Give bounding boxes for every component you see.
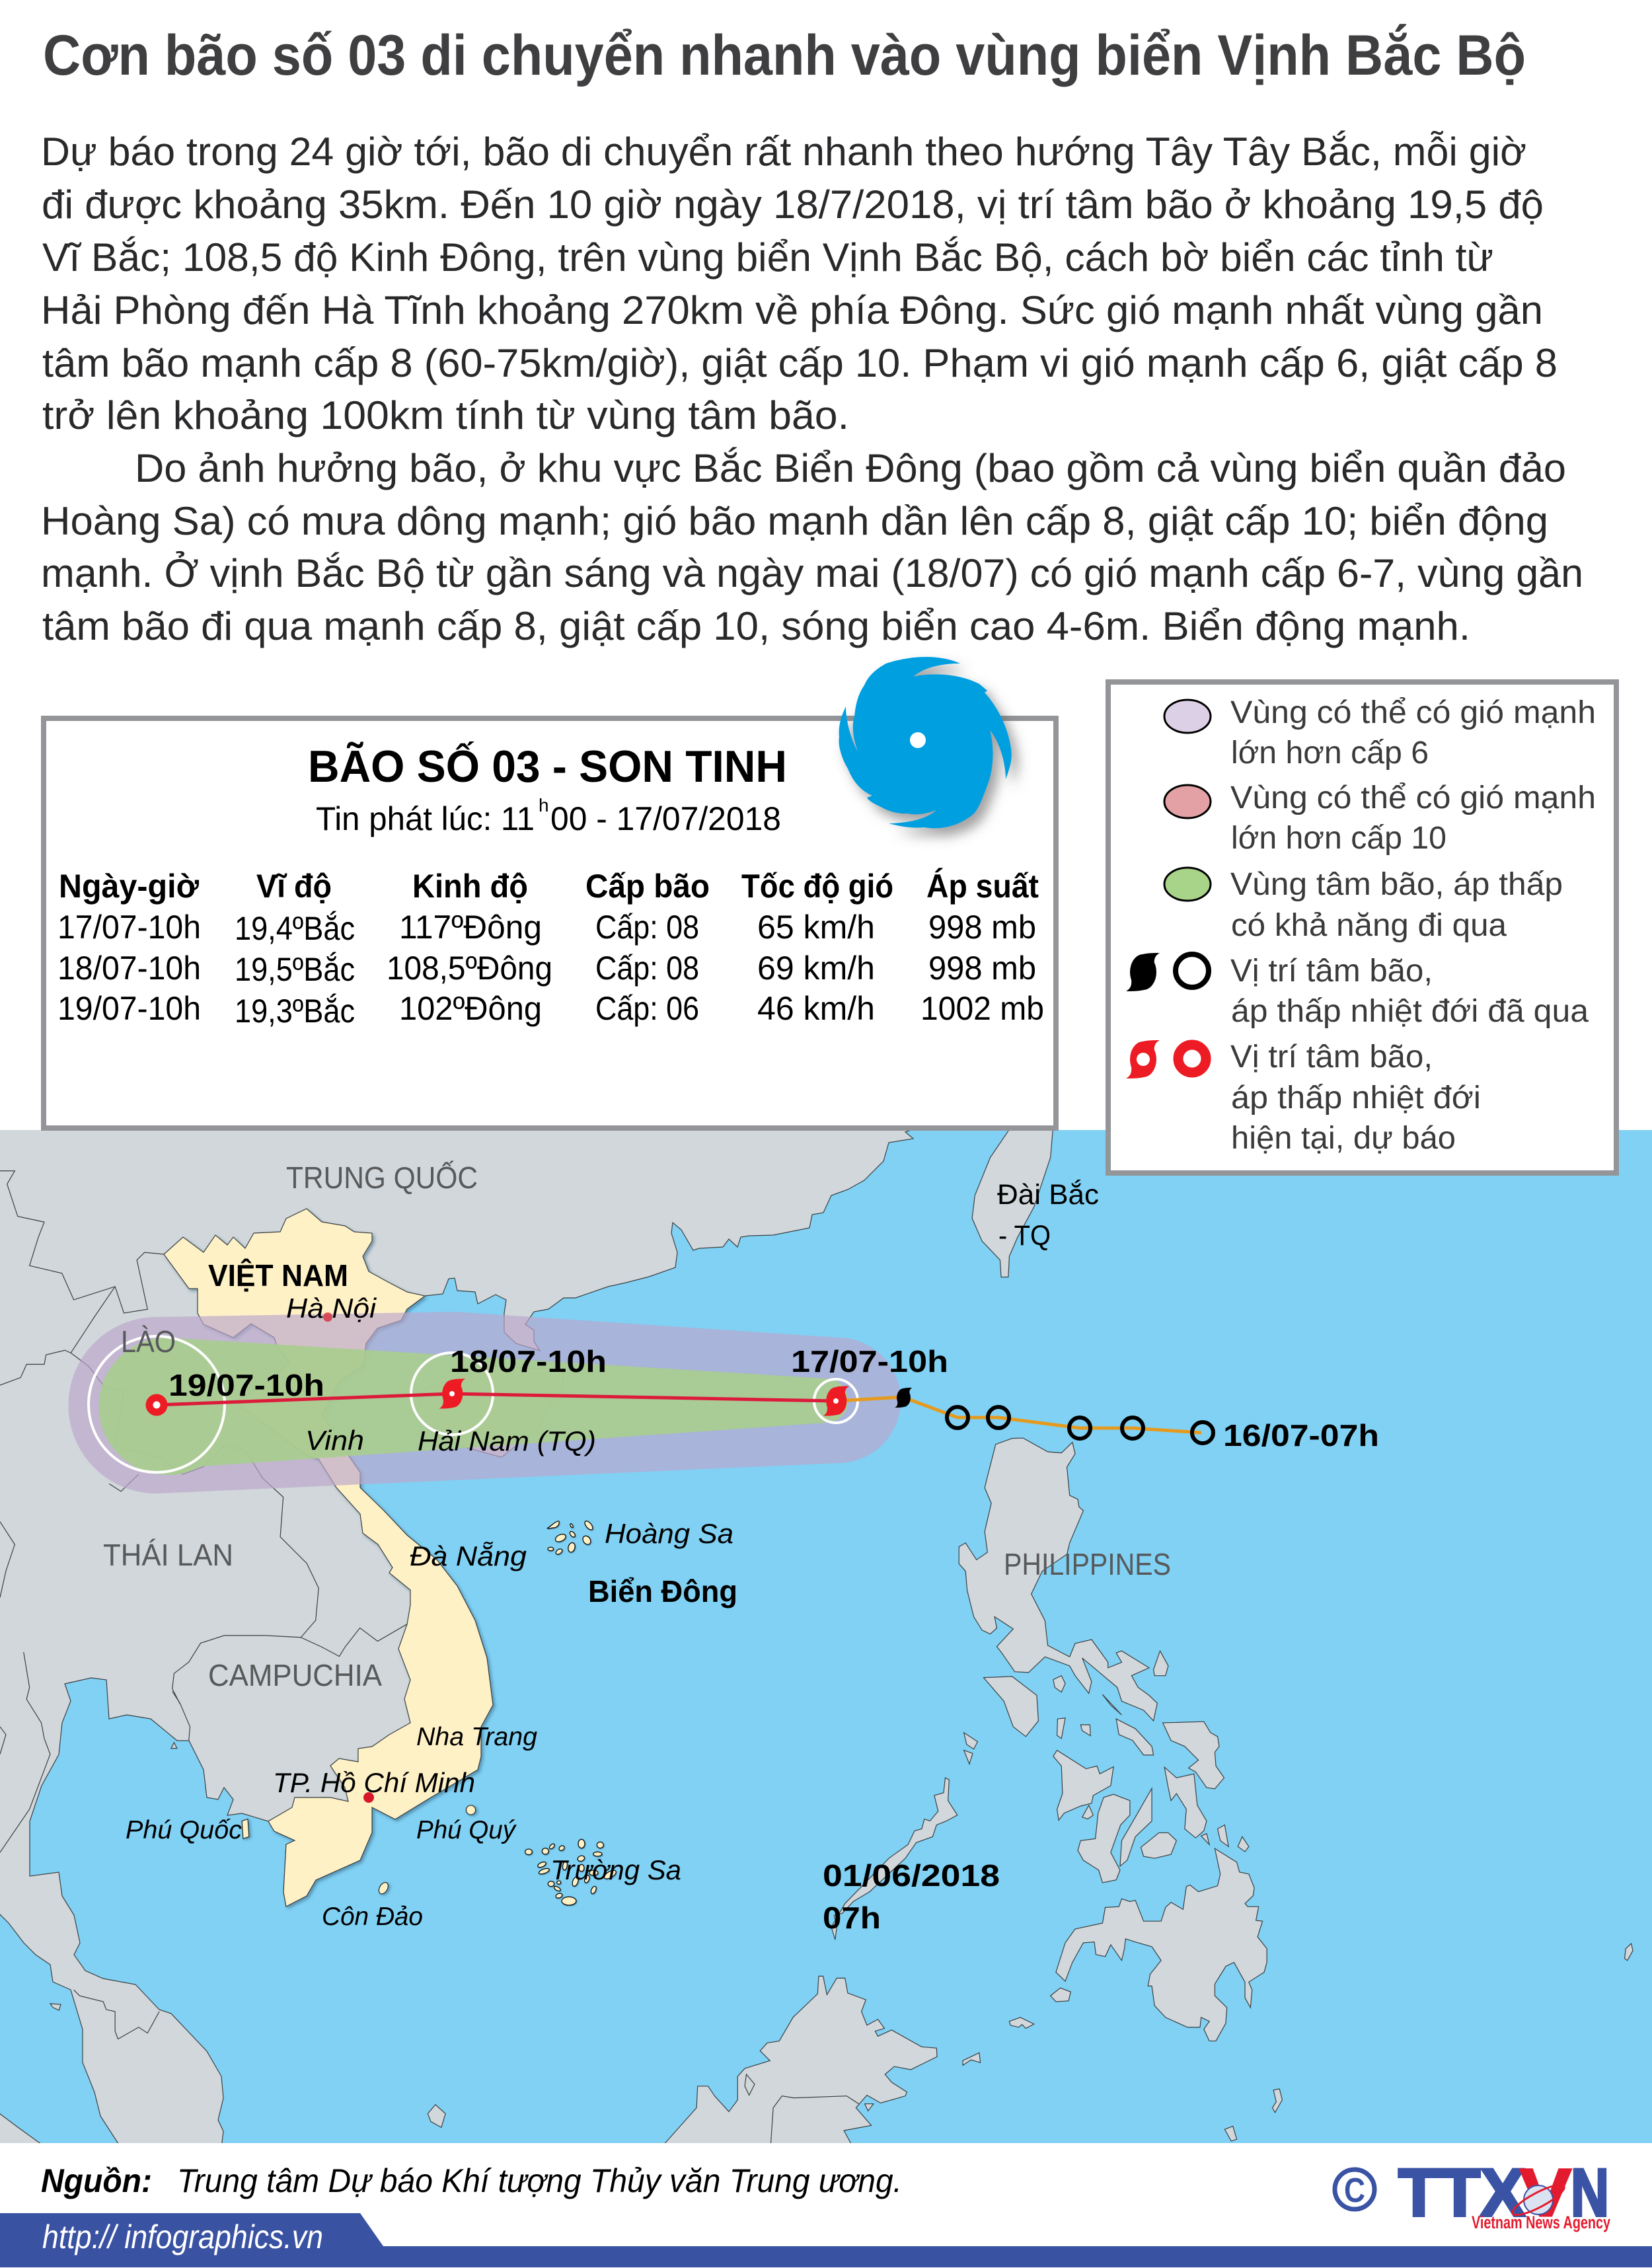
icon: forecast depression 19/07: [149, 1398, 164, 1412]
map labels: Đà Nẵng: [410, 1540, 527, 1571]
map labels: 07h: [823, 1901, 881, 1935]
table row 17/07: Cấp: 08: [595, 909, 699, 946]
footer bar: [0, 2213, 1652, 2267]
national borders north: [0, 1171, 407, 1704]
legend: level 10 wind zone: lớn hơn cấp 10: [1231, 821, 1446, 856]
text block: storm forecast description: Do ảnh hưởng bão, ở khu vực Bắc Biển Đông (bao gồm cả vùng biển quần đảo: [135, 446, 1566, 490]
logo: TTXVN: N: [1571, 2155, 1609, 2230]
icon: current storm 17/07: [823, 1386, 849, 1416]
logo: TTXVN: V: [1520, 2155, 1571, 2230]
map labels: 16/07-07h: [1223, 1418, 1379, 1453]
map labels: 18/07-10h: [450, 1344, 607, 1379]
Trường Sa archipelago: [525, 1839, 617, 1905]
table row 19/07: Cấp: 06: [595, 990, 699, 1027]
text block: storm forecast description: tâm bão mạnh cấp 8 (60-75km/giờ), giật cấp 10. Phạm vi gió mạnh cấp 6, giật cấp 8: [42, 341, 1558, 385]
legend: level 6 wind zone: Vùng có thể có gió mạnh: [1230, 695, 1596, 730]
Hoàng Sa archipelago: [547, 1520, 594, 1556]
legend: past positions: áp thấp nhiệt đới đã qua: [1231, 994, 1589, 1029]
Hainan island: [416, 1366, 564, 1457]
map labels: Hải Nam (TQ): [418, 1425, 596, 1456]
national borders south: [0, 1652, 445, 2127]
map labels: Phú Quý: [416, 1816, 517, 1844]
table row 19/07: 46 km/h: [757, 990, 875, 1027]
mainland Southeast Asia: [0, 1126, 922, 2148]
issue time: 00 - 17/07/2018: [550, 800, 781, 837]
legend: level 10 wind zone: [1164, 780, 1596, 856]
text block: storm forecast description: đi được khoảng 35km. Đến 10 giờ ngày 18/7/2018, vị trí tâm bão ở khoảng 19,5 độ: [42, 182, 1544, 227]
table row 18/07: 108,5ºĐông: [387, 950, 552, 987]
table column headers: Cấp bão: [585, 868, 710, 905]
website url: http:// infographics.vn: [42, 2218, 323, 2255]
map labels: Hoàng Sa: [605, 1518, 733, 1549]
text block: storm forecast description: [41, 130, 1583, 648]
map labels: 19/07-10h: [169, 1368, 324, 1402]
icon: blue cyclone: [839, 657, 1012, 828]
map labels: 17/07-10h: [791, 1344, 948, 1379]
icon: forecast storm 18/07: [439, 1379, 465, 1409]
table column headers: Vĩ độ: [256, 868, 332, 905]
map labels: [103, 1160, 1379, 1935]
table column headers: Áp suất: [926, 868, 1039, 905]
past track line: [836, 1397, 1201, 1433]
ocean: [0, 1130, 1652, 2143]
table row 19/07: 19,3ºBắc: [235, 993, 355, 1030]
Vietnamese islands near the south coast: [242, 1805, 476, 1895]
panel: storm data table: [44, 718, 1056, 1128]
table column headers: [59, 868, 1039, 905]
legend: current and forecast positions: [1126, 1040, 1481, 1156]
table column headers: Ngày-giờ: [59, 868, 199, 905]
table row 19/07: 19/07-10h: [57, 990, 201, 1027]
map labels: VIỆT NAM: [208, 1258, 348, 1293]
table row 18/07: 69 km/h: [757, 950, 875, 987]
logo: TTXVN: [1335, 2155, 1610, 2232]
logo: TTXVN: C: [1344, 2172, 1365, 2210]
text block: storm forecast description: tâm bão đi qua mạnh cấp 8, giật cấp 10, sóng biển cao 4-6m. Biển động mạnh.: [42, 604, 1470, 648]
text block: storm forecast description: Vĩ Bắc; 108,5 độ Kinh Đông, trên vùng biển Vịnh Bắc Bộ, cách bờ biển các tỉnh từ: [42, 235, 1493, 280]
Philippines and Borneo: [661, 1438, 1633, 2148]
table row 18/07: 19,5ºBắc: [235, 951, 355, 988]
map labels: Trường Sa: [550, 1854, 681, 1885]
text block: storm forecast description: trở lên khoảng 100km tính từ vùng tâm bão.: [42, 393, 849, 437]
legend: level 6 wind zone: lớn hơn cấp 6: [1231, 736, 1429, 771]
table row 17/07: 19,4ºBắc: [235, 910, 355, 947]
table row 17/07: 117ºĐông: [399, 909, 542, 946]
forecast circles: [89, 1336, 858, 1472]
map labels: - TQ: [998, 1220, 1051, 1252]
table row 17/07: 998 mb: [928, 909, 1036, 946]
title: Cơn bão số 03 di chuyển nhanh vào vùng biển Vịnh Bắc Bộ: [43, 24, 1526, 87]
map labels: TP. Hồ Chí Minh: [273, 1767, 475, 1798]
white strip above the map: [0, 1117, 1652, 1130]
issue time: Tin phát lúc: 11: [316, 800, 535, 837]
panel: legend: [1108, 682, 1616, 1173]
map labels: Phú Quốc: [126, 1816, 242, 1844]
map labels: 01/06/2018: [823, 1858, 1000, 1893]
Sumatra: [0, 2111, 46, 2148]
text block: storm forecast description: Hoàng Sa) có mưa dông mạnh; gió bão mạnh dần lên cấp 8, giật cấp 10; biển động: [41, 499, 1548, 543]
map labels: Vinh: [305, 1425, 364, 1456]
legend: current and forecast positions: hiện tại, dự báo: [1231, 1121, 1456, 1156]
source credit: Nguồn:: [41, 2162, 152, 2199]
legend: current and forecast positions: Vị trí tâm bão,: [1230, 1040, 1433, 1075]
table row 18/07: 18/07-10h: [57, 950, 201, 987]
legend: storm centre zone: Vùng tâm bão, áp thấp: [1230, 867, 1563, 902]
Viet Nam: [164, 1209, 493, 1907]
map labels: Biển Đông: [588, 1574, 737, 1608]
text block: storm forecast description: Hải Phòng đến Hà Tĩnh khoảng 270km về phía Đông. Sức gió mạnh nhất vùng gần: [41, 288, 1543, 332]
table row 17/07: 65 km/h: [757, 909, 875, 946]
storm centre cone: [99, 1338, 848, 1475]
text block: storm forecast description: mạnh. Ở vịnh Bắc Bộ từ gần sáng và ngày mai (18/07) có gió mạnh cấp 6-7, vùng gần: [41, 551, 1583, 595]
map labels: Hà Nội: [286, 1293, 377, 1324]
logo: TTXVN: TTX: [1398, 2155, 1525, 2230]
table row 18/07: 998 mb: [928, 950, 1036, 987]
table column headers: Kinh độ: [412, 868, 528, 905]
issue time: h: [539, 795, 549, 815]
table row 17/07: 17/07-10h: [57, 909, 201, 946]
map: storm track over the East Sea: [0, 1125, 1652, 2148]
map labels: CAMPUCHIA: [208, 1658, 382, 1692]
table row 19/07: 1002 mb: [920, 990, 1044, 1027]
wind zone above level 6: [69, 1312, 901, 1493]
table row 19/07: 102ºĐông: [399, 990, 542, 1027]
map labels: Đài Bắc: [997, 1179, 1099, 1211]
forecast track line: [157, 1394, 836, 1405]
city dots: [323, 1312, 374, 1803]
map labels: Côn Đảo: [322, 1903, 423, 1931]
map labels: LÀO: [121, 1324, 176, 1359]
map labels: THÁI LAN: [103, 1538, 233, 1572]
past storm positions: [947, 1407, 1213, 1443]
legend: current and forecast positions: áp thấp nhiệt đới: [1231, 1080, 1481, 1115]
table row 19/07: [57, 990, 1044, 1030]
map labels: TRUNG QUỐC: [286, 1160, 478, 1195]
table column headers: Tốc độ gió: [741, 868, 893, 905]
issue time: [316, 795, 781, 837]
source credit: Trung tâm Dự báo Khí tượng Thủy văn Trung ương.: [177, 2162, 902, 2199]
Taiwan: [972, 1125, 1053, 1277]
legend: past positions: [1126, 953, 1589, 1029]
legend: past positions: Vị trí tâm bão,: [1230, 954, 1433, 989]
table row 18/07: [57, 950, 1036, 988]
legend: storm centre zone: [1164, 867, 1563, 943]
legend: storm centre zone: có khả năng đi qua: [1231, 908, 1507, 943]
white footer background: [0, 2143, 1652, 2268]
legend: level 6 wind zone: [1164, 695, 1596, 771]
table row 17/07: [57, 909, 1036, 947]
map labels: PHILIPPINES: [1004, 1547, 1171, 1581]
table heading: BÃO SỐ 03 - SON TINH: [308, 741, 787, 792]
icon: latest past storm position: [895, 1388, 913, 1408]
text block: storm forecast description: Dự báo trong 24 giờ tới, bão di chuyển rất nhanh theo hướng Tây Tây Bắc, mỗi giờ: [41, 130, 1526, 174]
map labels: Nha Trang: [416, 1723, 537, 1751]
table row 18/07: Cấp: 08: [595, 950, 699, 987]
legend: level 10 wind zone: Vùng có thể có gió mạnh: [1230, 780, 1596, 815]
